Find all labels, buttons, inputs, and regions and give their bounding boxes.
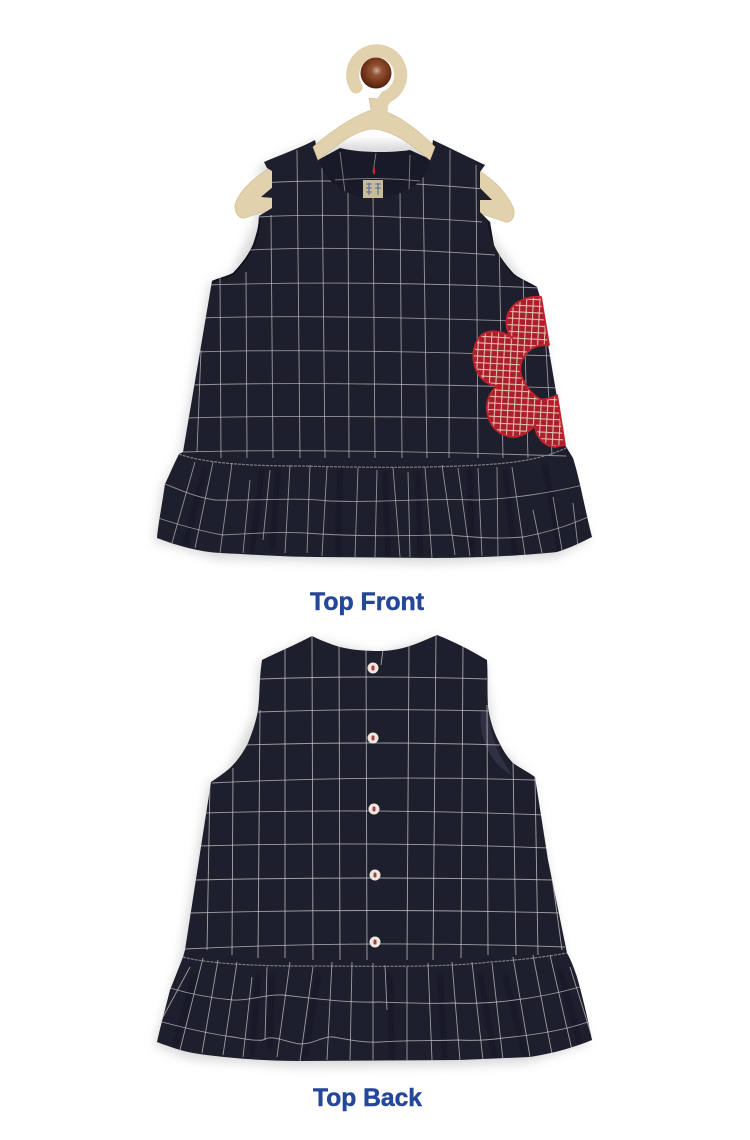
back button 2	[368, 732, 378, 744]
back grid and ruffle detail	[162, 635, 592, 1061]
dark back-piece sliver under right arm	[480, 213, 494, 245]
back ruffle seam	[183, 953, 567, 966]
back top body	[157, 635, 592, 1061]
front ruffle vertical lines	[172, 462, 578, 558]
front vertical grid lines	[197, 150, 552, 458]
icon: hanger lower arms	[235, 166, 514, 222]
back button 4	[370, 870, 380, 880]
red neck stitch	[373, 167, 375, 174]
garment shadow: back	[154, 638, 589, 1067]
heading: top back: Top Back	[313, 1084, 422, 1112]
right armhole lighter fabric	[481, 712, 512, 775]
front top body	[157, 140, 592, 558]
icon: wooden ball	[360, 58, 392, 88]
front grid and ruffle detail	[158, 150, 588, 558]
icon: hanger hook	[353, 51, 401, 108]
heading: top front: Top Front	[310, 588, 425, 616]
panel: top back	[154, 635, 592, 1067]
flower applique	[473, 297, 565, 447]
neck label tag	[363, 180, 383, 198]
back ruffle fold shadows	[175, 970, 580, 1060]
back neckline inner fabric	[318, 148, 432, 205]
icon: hanger shoulders	[313, 98, 435, 160]
ruffle fold shadows	[185, 465, 560, 557]
inner back neck grid lines	[335, 152, 420, 192]
back button 3	[368, 804, 380, 814]
back horizontal grid lines	[185, 677, 565, 949]
back button 5	[370, 936, 380, 948]
back vertical grid lines	[207, 635, 562, 960]
back button 1	[368, 662, 378, 674]
hanger notch shadow	[261, 184, 492, 200]
panel: top front	[154, 51, 592, 564]
back ruffle horizontal lines	[162, 987, 588, 1044]
front ruffle seam	[179, 448, 566, 467]
dark back-piece sliver under left arm	[250, 210, 272, 255]
front ruffle horizontal lines	[158, 484, 588, 538]
back ruffle vertical lines	[163, 955, 592, 1061]
front horizontal grid lines	[183, 181, 566, 456]
armhole shading	[212, 216, 537, 287]
garment shadow: front	[154, 143, 589, 564]
infographic canvas	[152, 44, 592, 1112]
